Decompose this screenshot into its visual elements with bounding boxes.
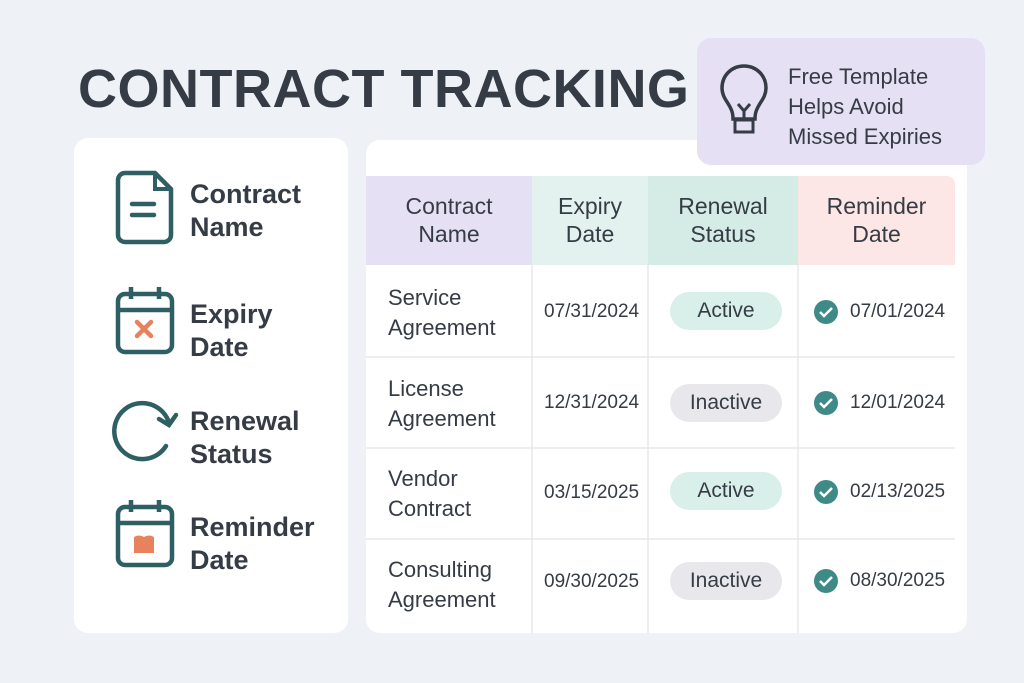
legend label: renewal status: Renewal [190,406,300,436]
table header [366,176,955,265]
title: CONTRACT TRACKING [78,59,689,119]
table header: Contract [406,193,492,219]
table header: Date [852,220,901,246]
status pills: Active [697,479,755,502]
table rows [388,285,639,612]
table rows: 03/15/2025 [544,482,639,503]
status pills: Inactive [690,569,762,592]
callout text: Missed Expiries [788,124,942,149]
legend label: renewal status [190,406,300,469]
legend label: expiry date: Date [190,332,249,362]
icon: light bulb [720,64,768,134]
legend label: renewal status: Status [190,439,273,469]
table rows: 09/30/2025 [544,571,639,592]
table header: Date [566,220,614,246]
table rows: Vendor [388,466,458,491]
callout: free template [697,38,985,165]
legend label: reminder date: Date [190,545,249,575]
grid lines [366,265,955,633]
callout text: Helps Avoid [788,94,904,119]
table rows: License [388,376,464,401]
table rows: 07/31/2024 [544,301,639,322]
table header: Expiry [558,193,622,219]
table header: Renewal [678,193,768,219]
panel: legend [74,138,348,633]
table header: Status [690,220,756,246]
table rows: Agreement [388,587,496,612]
reminder dates with checks: 02/13/2025 [850,481,945,502]
reminder dates with checks: 08/30/2025 [850,570,945,591]
icon: document [116,170,174,244]
status pills: Active [697,299,755,322]
legend label: expiry date [190,299,273,362]
table rows: 12/31/2024 [544,392,639,413]
callout text: Free Template [788,64,928,89]
table rows: Contract [388,496,471,521]
table header: Name [418,220,480,246]
legend label: contract name [190,179,301,242]
icon: calendar x [116,287,174,354]
panel: table [366,140,967,633]
legend label: expiry date: Expiry [190,299,273,329]
table rows: Agreement [388,315,496,340]
reminder dates with checks: 07/01/2024 [850,301,945,322]
table rows: Agreement [388,406,496,431]
icon: calendar reminder [116,500,174,568]
table header: Reminder [827,193,926,219]
callout text [788,64,942,149]
icon: renewal arrow [112,400,178,462]
legend label: contract name: Contract [190,179,301,209]
legend label: contract name: Name [190,212,264,242]
reminder dates with checks: 12/01/2024 [850,392,945,413]
legend label: reminder date [190,512,315,575]
legend label: reminder date: Reminder [190,512,315,542]
table rows: Service [388,285,461,310]
status pills: Inactive [690,391,762,414]
table rows: Consulting [388,557,492,582]
